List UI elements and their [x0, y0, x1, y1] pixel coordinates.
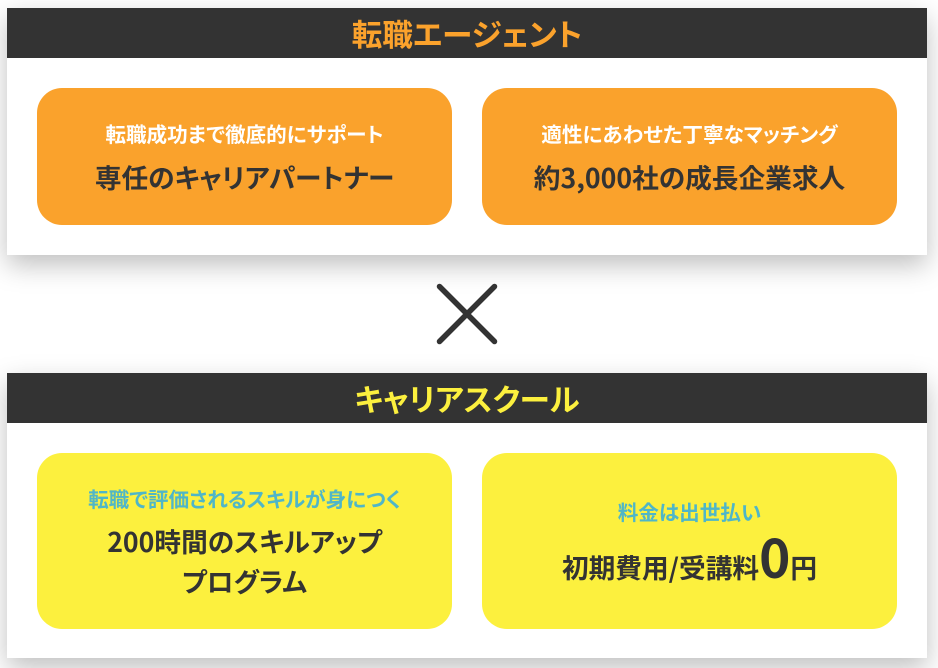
heading: career agent	[7, 8, 927, 58]
icon: multiply cross	[436, 284, 498, 344]
card: career partner	[37, 88, 452, 225]
text: fee label: 料金は出世払い	[618, 496, 761, 526]
card: matching	[482, 88, 897, 225]
heading: career agent: 転職エージェント	[352, 10, 582, 55]
panel: career school	[7, 373, 927, 658]
text: skills program	[107, 521, 383, 600]
text: skills program: 200時間のスキルアップ	[107, 521, 382, 560]
text: skills label: 転職で評価されるスキルが身につく	[88, 483, 401, 513]
panel: career agent	[7, 8, 927, 255]
card: skills	[37, 453, 452, 629]
text: support label: 転職成功まで徹底的にサポート	[105, 118, 384, 148]
text: zero fee: 初期費用/受講料0円	[562, 518, 817, 594]
heading: career school	[7, 373, 927, 423]
text: companies: 約3,000社の成長企業求人	[534, 157, 845, 196]
text: matching label: 適性にあわせた丁寧なマッチング	[541, 118, 838, 148]
text: skills program: プログラム	[182, 561, 307, 600]
text: career partner: 専任のキャリアパートナー	[95, 157, 394, 196]
heading: career school: キャリアスクール	[354, 375, 580, 420]
card: fees	[482, 453, 897, 629]
